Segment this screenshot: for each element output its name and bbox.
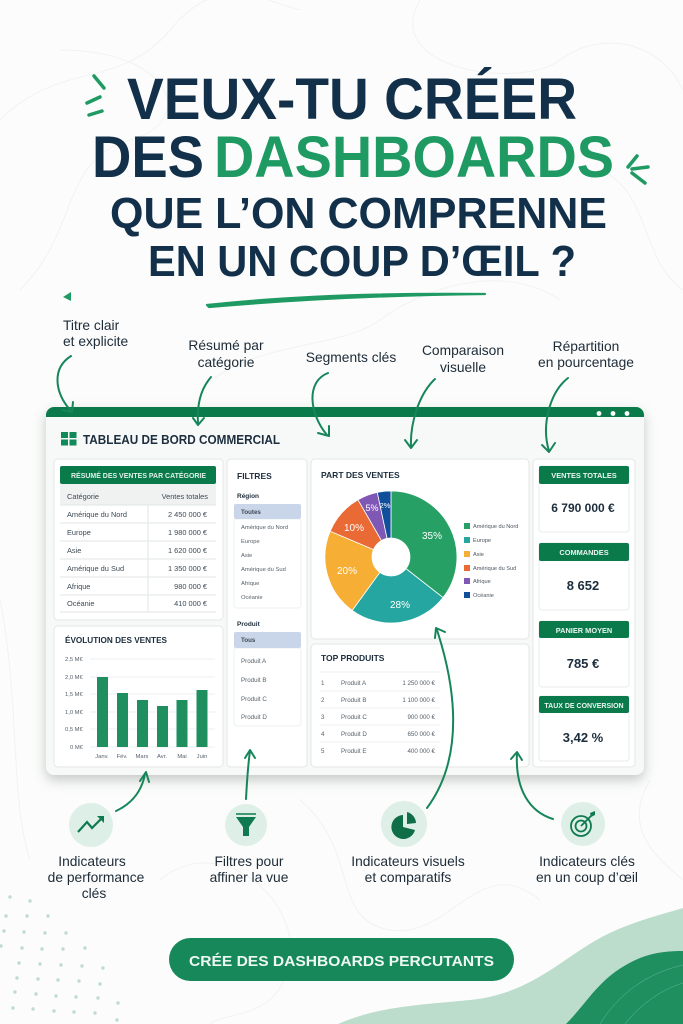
label: affiner la vue — [210, 870, 289, 885]
product filter: Produit — [237, 621, 261, 628]
region filter: Océanie — [241, 595, 263, 601]
call to action button — [169, 938, 514, 981]
bar chart: 0,5 M€ — [65, 727, 83, 733]
bar chart: 1,0 M€ — [65, 710, 83, 716]
pie labels: 2% — [380, 501, 391, 510]
title: DASHBOARDS — [214, 125, 614, 190]
decorative dots — [0, 895, 120, 1022]
icon: funnel — [225, 804, 267, 846]
bar chart: 0 M€ — [70, 745, 84, 751]
table: Amérique du Sud — [67, 564, 124, 573]
top callout labels: Répartition — [553, 339, 619, 354]
label — [48, 854, 145, 901]
table: Asie — [67, 546, 81, 555]
bottom feature: visual — [351, 801, 465, 885]
chart heading: ÉVOLUTION DES VENTES — [65, 635, 167, 645]
region filter: Amérique du Nord — [241, 525, 288, 531]
pie labels: 10% — [344, 523, 364, 534]
KPI: conversion rate: TAUX DE CONVERSION — [544, 703, 624, 710]
label: Indicateurs — [58, 854, 126, 869]
label — [351, 854, 465, 885]
product filter: Produit B — [241, 677, 266, 684]
KPI: total sales — [539, 466, 629, 532]
product filter: Produit C — [241, 696, 267, 703]
products table: 1 250 000 € — [402, 680, 436, 687]
bar chart: 1,5 M€ — [65, 692, 83, 698]
KPI: average basket: 785 € — [567, 656, 599, 671]
title sparks right — [628, 156, 648, 183]
products table: Produit D — [341, 731, 367, 738]
top callout labels: et explicite — [63, 334, 129, 349]
products heading: TOP PRODUITS — [321, 653, 385, 663]
label: Indicateurs visuels — [351, 854, 465, 869]
top callout labels: Titre clair — [63, 318, 120, 333]
label — [210, 854, 289, 885]
title: QUE L’ON COMPRENNE — [110, 189, 607, 238]
products table: 3 — [321, 714, 325, 721]
products table: Produit C — [341, 714, 367, 721]
bar chart: Janv. — [95, 754, 109, 760]
label: Filtres pour — [214, 854, 284, 869]
panel: sales share — [311, 459, 529, 639]
products table: Produit A — [341, 680, 367, 687]
region filter — [234, 493, 301, 608]
products table: Produit E — [341, 748, 366, 755]
bar chart: Fév. — [117, 754, 128, 760]
products table — [320, 672, 440, 755]
pie labels: 35% — [422, 531, 442, 542]
title: VEUX-TU CRÉER — [127, 67, 577, 132]
KPI: total sales: 6 790 000 € — [551, 501, 615, 515]
region filter: Afrique — [241, 581, 259, 587]
top callout labels: Comparaison — [422, 343, 504, 358]
bottom feature: key figures — [536, 802, 638, 885]
icon: target — [561, 802, 605, 846]
window dots — [597, 411, 629, 416]
region filter: Région — [237, 493, 259, 500]
top callout labels: catégorie — [198, 355, 255, 370]
top callout labels: Résumé par — [188, 338, 264, 353]
pie legend: Asie — [473, 552, 484, 558]
top callout labels: en pourcentage — [538, 355, 634, 370]
table — [60, 484, 216, 612]
pie legend: Afrique — [473, 579, 491, 585]
KPI: orders: COMMANDES — [559, 548, 609, 557]
small triangle — [63, 292, 71, 301]
icon: trend line — [69, 803, 113, 847]
label: en un coup d’œil — [536, 870, 638, 885]
bar chart: 2,0 M€ — [65, 675, 83, 681]
products table: 400 000 € — [407, 748, 436, 755]
bar chart: Mai — [177, 754, 187, 760]
title: DES — [92, 125, 204, 190]
bottom feature: filters — [210, 804, 289, 885]
products table: 900 000 € — [407, 714, 436, 721]
icon: dashboard grid — [61, 432, 76, 446]
table heading: RÉSUMÉ DES VENTES PAR CATÉGORIE — [71, 471, 206, 480]
panel: top products — [311, 644, 529, 767]
title sparks left — [87, 76, 104, 115]
panel: dashboard window — [46, 407, 644, 775]
product filter: Produit A — [241, 658, 267, 665]
table: 1 980 000 € — [168, 528, 207, 537]
products table: 1 — [321, 680, 325, 687]
region filter: Amérique du Sud — [241, 567, 286, 573]
arrows from top labels — [57, 356, 568, 452]
pie heading: PART DES VENTES — [321, 470, 400, 480]
label: de performance — [48, 870, 145, 885]
region filter: Asie — [241, 553, 252, 559]
bar chart: Juin — [197, 754, 207, 760]
table: Afrique — [67, 582, 90, 591]
table: Amérique du Nord — [67, 510, 127, 519]
pie legend: Europe — [473, 538, 491, 544]
products table: 650 000 € — [407, 731, 436, 738]
pie labels — [337, 501, 442, 611]
panel: category summary — [54, 459, 223, 620]
table: Océanie — [67, 599, 95, 608]
table: 1 620 000 € — [168, 546, 207, 555]
KPI: total sales: VENTES TOTALES — [551, 471, 617, 480]
table: 980 000 € — [174, 582, 207, 591]
table: 410 000 € — [174, 599, 207, 608]
pie chart — [325, 491, 457, 623]
call to action button: CRÉE DES DASHBOARDS PERCUTANTS — [189, 953, 494, 970]
products table: 5 — [321, 748, 325, 755]
filters heading: FILTRES — [237, 471, 272, 481]
panel: KPI column — [533, 459, 635, 767]
bar chart — [65, 657, 215, 760]
table: Europe — [67, 528, 91, 537]
products table: 1 100 000 € — [402, 697, 436, 704]
product filter — [234, 621, 301, 726]
panel: filters — [227, 459, 307, 767]
pie labels: 5% — [365, 503, 379, 513]
products table: 4 — [321, 731, 325, 738]
bottom feature: performance — [48, 803, 145, 901]
top callout labels: Segments clés — [306, 350, 396, 365]
pie labels: 28% — [390, 600, 410, 611]
KPI: orders: 8 652 — [567, 578, 599, 593]
title — [92, 67, 614, 286]
bar chart: Mars — [136, 754, 149, 760]
label: Indicateurs clés — [539, 854, 635, 869]
bar chart: 2,5 M€ — [65, 657, 83, 663]
pie legend — [464, 523, 518, 599]
window top bar — [46, 407, 644, 417]
decorative blob: dark green — [566, 951, 683, 1024]
top callout labels: visuelle — [440, 360, 486, 375]
panel: sales evolution — [54, 626, 223, 767]
products table: Produit B — [341, 697, 366, 704]
KPI: average basket: PANIER MOYEN — [556, 626, 612, 635]
label: clés — [82, 886, 106, 901]
icon: pie — [381, 801, 427, 847]
table: 2 450 000 € — [168, 510, 207, 519]
KPI: conversion rate — [539, 696, 629, 761]
region filter: Toutes — [241, 509, 261, 516]
table: Ventes totales — [162, 492, 208, 501]
pie legend: Océanie — [473, 593, 494, 599]
title: EN UN COUP D’ŒIL ? — [148, 237, 576, 286]
region filter: Europe — [241, 539, 260, 545]
label: et comparatifs — [365, 870, 451, 885]
decorative blob: light green — [338, 908, 683, 1024]
bar chart: Avr. — [157, 754, 167, 760]
KPI: average basket — [539, 621, 629, 687]
top callout labels — [63, 318, 634, 375]
pie legend: Amérique du Nord — [473, 524, 518, 530]
table: 1 350 000 € — [168, 564, 207, 573]
KPI: orders — [539, 543, 629, 610]
table header bar — [60, 466, 216, 484]
pie legend: Amérique du Sud — [473, 566, 516, 572]
arrows from bottom icons — [116, 628, 553, 819]
product filter: Produit D — [241, 714, 267, 721]
products table: 2 — [321, 697, 325, 704]
table: Catégorie — [67, 492, 99, 501]
title underline — [207, 294, 485, 307]
product filter: Tous — [241, 637, 256, 644]
KPI: conversion rate: 3,42 % — [563, 730, 604, 745]
pie labels: 20% — [337, 566, 357, 577]
label — [536, 854, 638, 885]
dashboard heading: TABLEAU DE BORD COMMERCIAL — [83, 432, 280, 447]
